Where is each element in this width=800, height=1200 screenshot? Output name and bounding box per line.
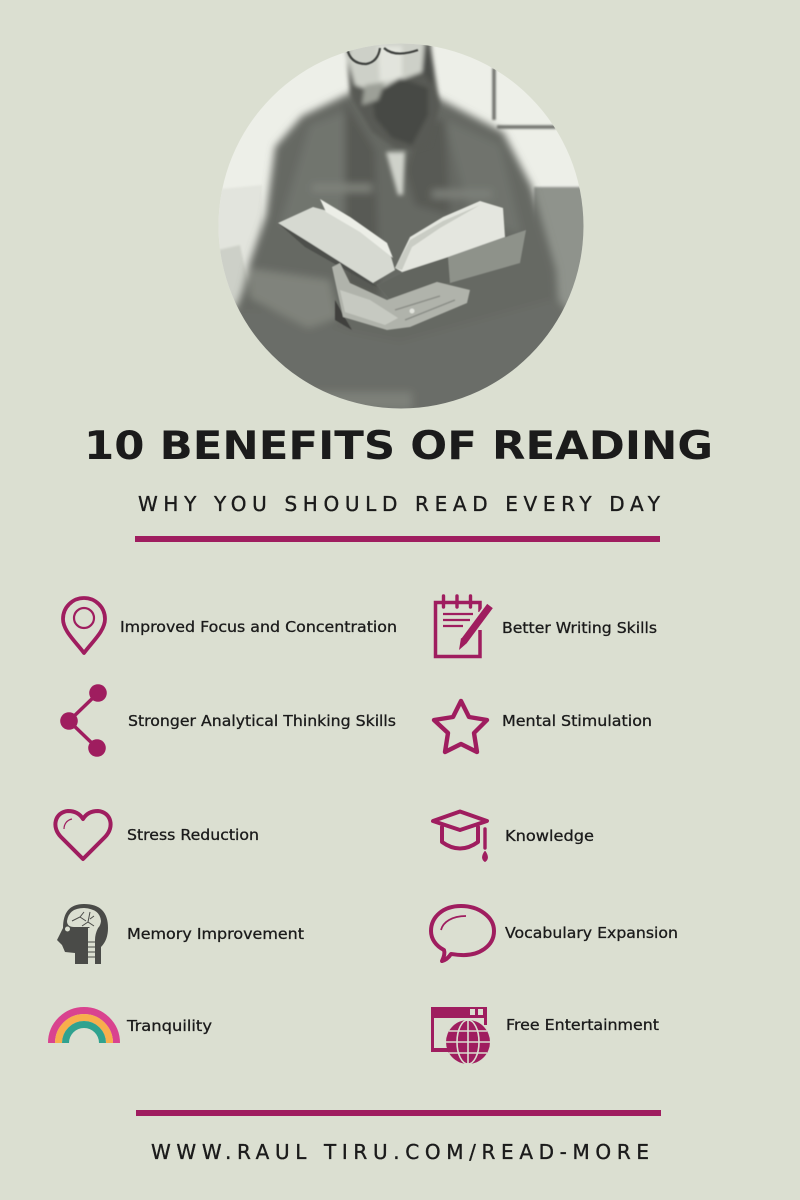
label: Improved Focus and Concentration	[120, 618, 397, 636]
label: Stronger Analytical Thinking Skills	[128, 712, 396, 730]
icon: speech bubble	[431, 906, 494, 961]
benefit: writing skills	[436, 596, 657, 656]
label: Free Entertainment	[506, 1016, 659, 1034]
book left pages	[278, 207, 395, 283]
benefit: stress reduction	[55, 811, 259, 859]
benefit: knowledge	[433, 812, 594, 861]
icon: rainbow	[52, 1010, 116, 1043]
footer url: WWW.RAUL TIRU.COM/READ-MORE	[151, 1140, 649, 1164]
benefit: free entertainment	[431, 1007, 659, 1064]
wrist band	[335, 300, 352, 330]
title: 10 BENEFITS OF READING	[84, 423, 713, 469]
label: Tranquility	[126, 1017, 212, 1035]
label: Vocabulary Expansion	[505, 924, 678, 942]
benefit: memory improvement	[57, 904, 304, 964]
icon: heart	[55, 811, 111, 859]
icon: browser window and globe	[431, 1007, 490, 1064]
icon: head with brain	[57, 904, 108, 964]
divider: bottom	[136, 1110, 661, 1116]
label: Better Writing Skills	[502, 619, 657, 637]
benefit: vocabulary expansion	[431, 906, 678, 961]
glasses	[347, 48, 418, 64]
icon: share nodes	[60, 684, 107, 757]
icon: location pin	[63, 598, 105, 653]
book right pages	[395, 201, 505, 272]
shirt collar	[386, 152, 405, 195]
icon: star	[434, 701, 487, 752]
book cover	[448, 230, 526, 284]
subtitle: WHY YOU SHOULD READ EVERY DAY	[138, 492, 661, 516]
label: Knowledge	[505, 827, 594, 845]
benefit: tranquility	[52, 1010, 212, 1043]
head and beard	[346, 40, 440, 150]
hand	[332, 263, 470, 330]
icon: notepad and pencil	[436, 596, 490, 656]
benefit: mental stimulation	[434, 701, 652, 752]
photo: man reading a book	[210, 40, 590, 420]
label: Stress Reduction	[127, 826, 259, 844]
benefit: analytical thinking	[60, 684, 396, 757]
label: Mental Stimulation	[502, 712, 652, 730]
icon: graduation cap	[433, 812, 487, 861]
divider: top	[135, 536, 660, 542]
label: Memory Improvement	[127, 925, 304, 943]
benefit: improved focus	[63, 598, 397, 653]
